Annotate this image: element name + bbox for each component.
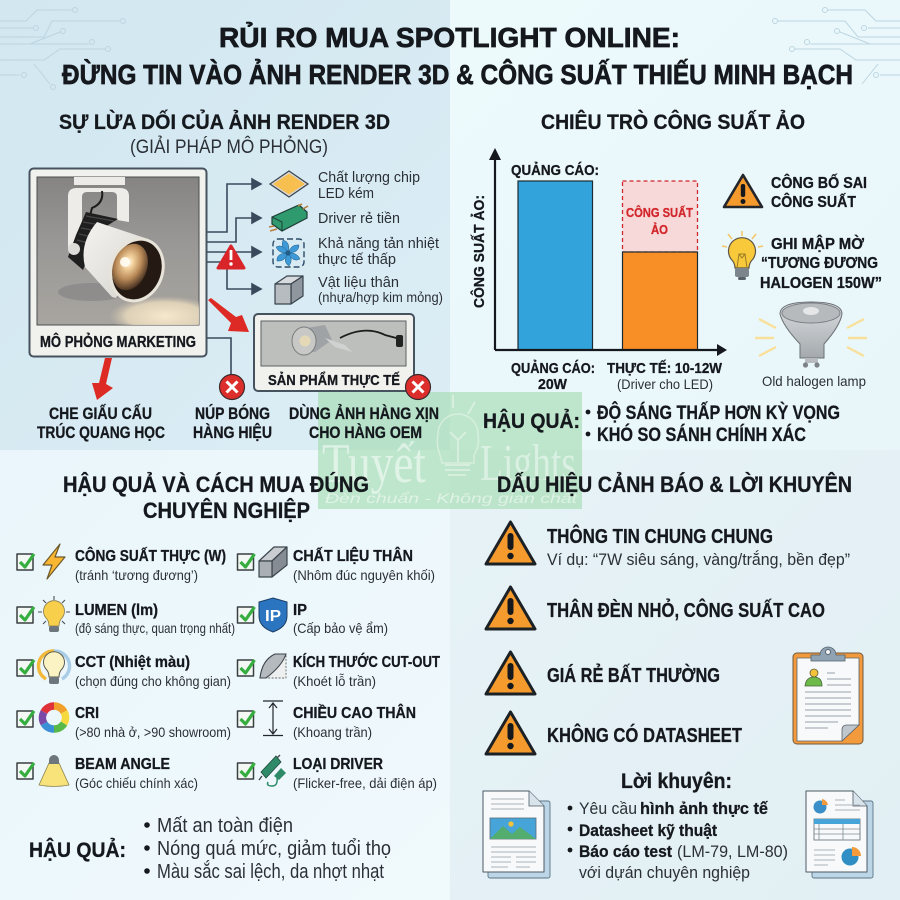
icon: light bulb [722,231,763,280]
item: real wattage: CÔNG SUẤT THỰC (W) [75,546,226,565]
item: small body high power: THÂN ĐÈN NHỎ, CÔNG SUẤT CAO [547,598,825,622]
checklist checkboxes [17,554,254,779]
watermark logo [318,392,582,509]
text: OEM images: CHO HÀNG OEM [309,423,422,442]
item: generic information [547,524,850,569]
text: OEM images [289,404,439,442]
heading: render deception: (GIẢI PHÁP MÔ PHỎNG) [130,136,328,158]
heading: advice: Lời khuyên: [621,770,732,793]
bar chart: advertised vs actual: ẢO [651,222,668,237]
advice list: Báo cáo test [579,842,672,861]
consequences: safety risks: Nóng quá mức, giảm tuổi thọ [157,838,391,860]
item: body material [293,546,435,583]
panel: render deception [30,110,443,442]
item: body material: (Nhôm đúc nguyên khối) [293,567,435,583]
advice list: Yêu cầu [579,799,637,818]
bar chart: advertised vs actual: 20W [538,376,568,393]
card: marketing simulation: MÔ PHỎNG MARKETING [40,332,196,351]
item: cut-out size: KÍCH THƯỚC CUT-OUT [293,652,440,671]
advice list [568,799,788,882]
item: CCT: CCT (Nhiệt màu) [75,654,190,671]
text: vague equivalent: “TƯƠNG ĐƯƠNG [761,255,878,272]
icon: clipboard [793,647,863,744]
bar chart: advertised vs actual: CÔNG SUẤT [626,205,693,220]
item: beam angle [75,756,198,791]
item: body height: (Khoang trần) [293,724,372,740]
icon: LED chip [270,171,308,197]
card: marketing simulation [30,168,221,356]
panel: how to buy [17,472,440,883]
icon: housing block [275,276,303,304]
heading: render deception [59,110,390,158]
consequences: safety risks: HẬU QUẢ: [29,838,126,862]
watermark logo: Đèn chuẩn - Không gian chất [325,490,579,506]
consequences: safety risks [29,815,391,883]
consequences: low brightness: KHÓ SO SÁNH CHÍNH XÁC [597,422,806,446]
heading: fake wattage: CHIÊU TRÒ CÔNG SUẤT ẢO [541,110,805,134]
text: hide optical structure [37,404,165,442]
defect labels: Vật liệu thân [318,274,399,291]
icon: x mark left [220,374,244,400]
consequences: low brightness [483,400,840,446]
item: cut-out size [293,652,440,689]
panel: warning signs and advice [483,472,873,882]
advice list: Datasheet kỹ thuật [579,821,717,840]
item: abnormally cheap: GIÁ RẺ BẤT THƯỜNG [547,663,720,687]
watermark logo: Lights [480,435,576,492]
item: CCT: (chọn đúng cho không gian) [75,673,231,689]
text: false declaration: CÔNG BỐ SAI [771,172,867,192]
icon: cut-out [260,654,286,678]
icon: CCT bulb [38,651,70,684]
consequences: low brightness: ĐỘ SÁNG THẤP HƠN KỲ VỌNG [597,400,840,424]
icon: document with image [483,791,550,878]
icon: beam cone [39,755,69,786]
heading: warning signs: DẤU HIỆU CẢNH BÁO & LỜI KHUYÊN [497,472,852,497]
text: brand shadow: NÚP BÓNG [195,404,270,423]
text: hide optical structure: CHE GIẤU CẤU [49,404,152,423]
icon: warning 4 [486,712,535,754]
arrow: red to real product [208,298,249,332]
heading: render deception: SỰ LỪA DỐI CỦA ẢNH RENDER 3D [59,110,390,134]
defect labels: Chất lượng chip [318,169,420,186]
item: no datasheet: KHÔNG CÓ DATASHEET [547,723,742,747]
connector arrows to defects [207,179,261,376]
item: body material: CHẤT LIỆU THÂN [293,546,413,565]
bar chart: advertised vs actual: QUẢNG CÁO: [511,360,595,377]
icon: x mark right [406,374,430,400]
caption: old halogen lamp: Old halogen lamp [762,373,866,389]
item: real wattage [75,546,226,583]
item: CRI: (>80 nhà ở, >90 showroom) [75,724,231,740]
item: real wattage: (tránh ‘tương đương’) [75,567,198,583]
item: lumen [75,602,235,636]
item: IP: (Cấp bảo vệ ẩm) [293,620,388,636]
item: generic information: Ví dụ: “7W siêu sáng, vàng/trắng, bền đẹp” [547,550,850,569]
item: driver type [293,756,437,791]
photo: bare lamp [292,325,403,355]
text: hide optical structure: TRÚC QUANG HỌC [37,423,165,442]
arrow: red downward [92,358,113,400]
item: lumen: LUMEN (lm) [75,602,158,619]
advice list: với dựán chuyên nghiệp [579,863,750,882]
icon: lightning bolt [43,544,65,579]
icon: IP shield: IP [265,608,281,625]
icon: height dimension [263,701,283,736]
title: RỦI RO MUA SPOTLIGHT ONLINE: [219,21,680,53]
title [62,21,853,90]
bar chart: advertised vs actual: THỰC TẾ: 10-12W [607,360,723,377]
defect labels: (nhựa/hợp kim mỏng) [318,290,443,305]
defect labels: Khả năng tản nhiệt [318,235,440,252]
icon: warning 1 [486,522,535,564]
text: false declaration: CÔNG SUẤT [771,192,856,211]
watermark logo: Tuyết [322,433,426,495]
icon: CRI colour ring [42,706,66,729]
photo: track spotlight render [58,177,199,325]
text: OEM images: DÙNG ẢNH HÀNG XỊN [289,404,439,423]
heading: how to buy: HẬU QUẢ VÀ CÁCH MUA ĐÚNG [63,472,369,497]
icon: warning 3 [486,652,535,694]
icon: orange warning [724,175,762,207]
item: beam angle: BEAM ANGLE [75,756,170,773]
text: vague equivalent: HALOGEN 150W” [760,275,882,292]
item: IP [293,602,388,636]
advice list: (LM-79, LM-80) [677,842,788,861]
text: vague equivalent: GHI MẬP MỜ [771,234,864,253]
item: driver type: LOẠI DRIVER [293,756,383,773]
icon: halogen lamp [755,302,867,368]
text: vague equivalent [760,234,882,292]
card: real product: SẢN PHẨM THỰC TẾ [268,371,400,389]
text: false declaration [771,172,867,211]
item: cut-out size: (Khoét lỗ trần) [293,673,376,689]
consequences: low brightness: HẬU QUẢ: [483,409,580,433]
icon: document with charts [806,791,873,878]
item: beam angle: (Góc chiếu chính xác) [75,775,198,791]
item: driver type: (Flicker-free, dải điện áp) [293,775,437,791]
item: lumen: (độ sáng thực, quan trọng nhất) [75,620,235,636]
text: brand shadow [193,404,272,442]
bar chart: advertised vs actual: CÔNG SUẤT ẢO: [470,195,488,308]
consequences: safety risks: Màu sắc sai lệch, da nhợt nhạt [157,860,384,883]
item: body height [293,703,416,740]
bar chart: advertised vs actual: (Driver cho LED) [617,376,713,392]
bar chart: advertised vs actual: QUẢNG CÁO: [511,162,599,179]
item: body height: CHIỀU CAO THÂN [293,703,416,722]
icon: lumen bulb [38,596,70,632]
consequences: safety risks: Mất an toàn điện [157,815,293,837]
defect labels: Driver rẻ tiền [318,210,400,227]
bar chart: advertised vs actual [470,148,727,393]
defect labels [318,169,443,305]
icon: warning red [218,246,244,268]
icon: warning 2 [486,587,535,629]
defect labels: LED kém [318,185,374,202]
item: CRI: CRI [75,705,99,722]
icon: driver [269,204,308,231]
icon: driver plug [259,755,286,786]
icon: cooling fan [273,239,304,267]
defect labels: thực tế thấp [318,251,396,268]
item: CRI [75,705,231,740]
icon: material block [259,547,287,577]
item: IP: IP [293,602,307,619]
advice list: hình ảnh thực tế [640,799,769,818]
panel: fake wattage [470,110,882,446]
icon: IP shield [259,598,287,632]
item: generic information: THÔNG TIN CHUNG CHUNG [547,524,773,548]
item: CCT [75,654,231,689]
heading: how to buy: CHUYÊN NGHIỆP [143,498,310,523]
card: real product [254,314,414,391]
heading: how to buy [63,472,369,523]
text: brand shadow: HÀNG HIỆU [193,423,272,442]
